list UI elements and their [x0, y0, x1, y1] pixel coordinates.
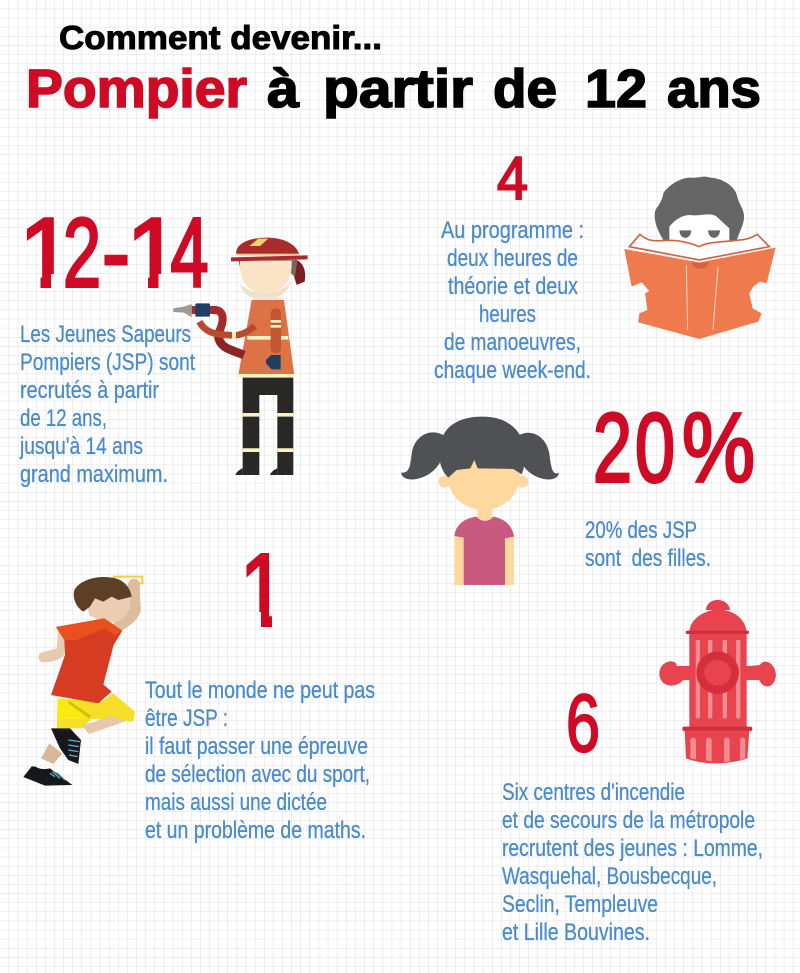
- text block: programme: [434, 217, 591, 384]
- heading: Pompier à partir de 12 ans: ans: [667, 59, 761, 119]
- text block: recruiting centres: [502, 779, 763, 946]
- text block: recruitment age: grand maximum.: [20, 461, 168, 488]
- title: [26, 19, 761, 119]
- text block: programme: théorie et deux: [448, 273, 578, 300]
- heading: Pompier à partir de 12 ans: partir: [323, 59, 473, 119]
- text block: selection test: de sélection avec du sport,: [145, 761, 370, 788]
- text block: recruitment age: Pompiers (JSP) sont: [20, 349, 195, 376]
- stat: 12-14: 1: [19, 198, 74, 308]
- text block: selection test: [145, 677, 375, 844]
- text block: recruiting centres: Wasquehal, Bousbecque,: [502, 863, 717, 890]
- stat: 12-14: [26, 216, 208, 288]
- text block: recruiting centres: Six centres d'incendie: [502, 779, 685, 806]
- text block: recruitment age: recrutés à partir: [20, 377, 159, 404]
- text block: recruiting centres: Seclin, Templeuve: [502, 891, 658, 918]
- text block: recruiting centres: et Lille Bouvines.: [502, 919, 650, 946]
- text block: programme: heures: [479, 301, 536, 328]
- stat: 20%: %: [682, 392, 755, 502]
- heading: Pompier à partir de 12 ans: Pompier: [26, 59, 247, 119]
- text block: girls share: [585, 517, 711, 572]
- text block: programme: Au programme :: [441, 217, 584, 244]
- text block: selection test: et un problème de maths.: [145, 817, 366, 844]
- stat: 1: 1: [240, 532, 286, 648]
- text block: recruitment age: jusqu'à 14 ans: [19, 433, 143, 460]
- stat: 4: 4: [497, 145, 528, 212]
- heading: Pompier à partir de 12 ans: à: [267, 59, 300, 119]
- text block: recruitment age: Les Jeunes Sapeurs: [20, 321, 191, 348]
- text block: selection test: mais aussi une dictée: [145, 789, 327, 816]
- stat: 12-14: 1: [126, 198, 181, 308]
- stat: 20%: [593, 392, 755, 502]
- icon: running boy: [23, 577, 142, 786]
- text block: recruitment age: [19, 321, 195, 488]
- stat: 20%: 0: [635, 392, 675, 502]
- heading: Pompier à partir de 12 ans: de: [493, 59, 557, 119]
- icon: firefighter: [173, 238, 308, 475]
- icon: girl with pigtails: [401, 417, 559, 585]
- icon: fire hydrant: [659, 600, 776, 763]
- text block: recruitment age: de 12 ans,: [20, 405, 107, 432]
- heading: Pompier à partir de 12 ans: 12: [585, 59, 647, 119]
- text block: programme: deux heures de: [447, 245, 578, 272]
- stat: 12-14: 4: [170, 198, 208, 308]
- stat: 6: 6: [566, 678, 600, 769]
- stat: 20%: 2: [593, 392, 632, 502]
- stat: 12-14: -: [102, 198, 130, 308]
- stat: 12-14: 2: [63, 198, 101, 308]
- text block: programme: chaque week-end.: [434, 357, 591, 384]
- heading: Comment devenir: Comment devenir...: [59, 19, 382, 56]
- text block: girls share: sont des filles.: [585, 545, 711, 572]
- text block: girls share: 20% des JSP: [585, 517, 697, 544]
- icon: reader with book: [624, 177, 776, 339]
- heading: Pompier à partir de 12 ans: [26, 59, 761, 119]
- text block: selection test: être JSP :: [145, 705, 228, 732]
- text block: selection test: Tout le monde ne peut pas: [145, 677, 375, 704]
- text block: selection test: il faut passer une épreuve: [145, 733, 368, 760]
- text block: programme: de manoeuvres,: [444, 329, 581, 356]
